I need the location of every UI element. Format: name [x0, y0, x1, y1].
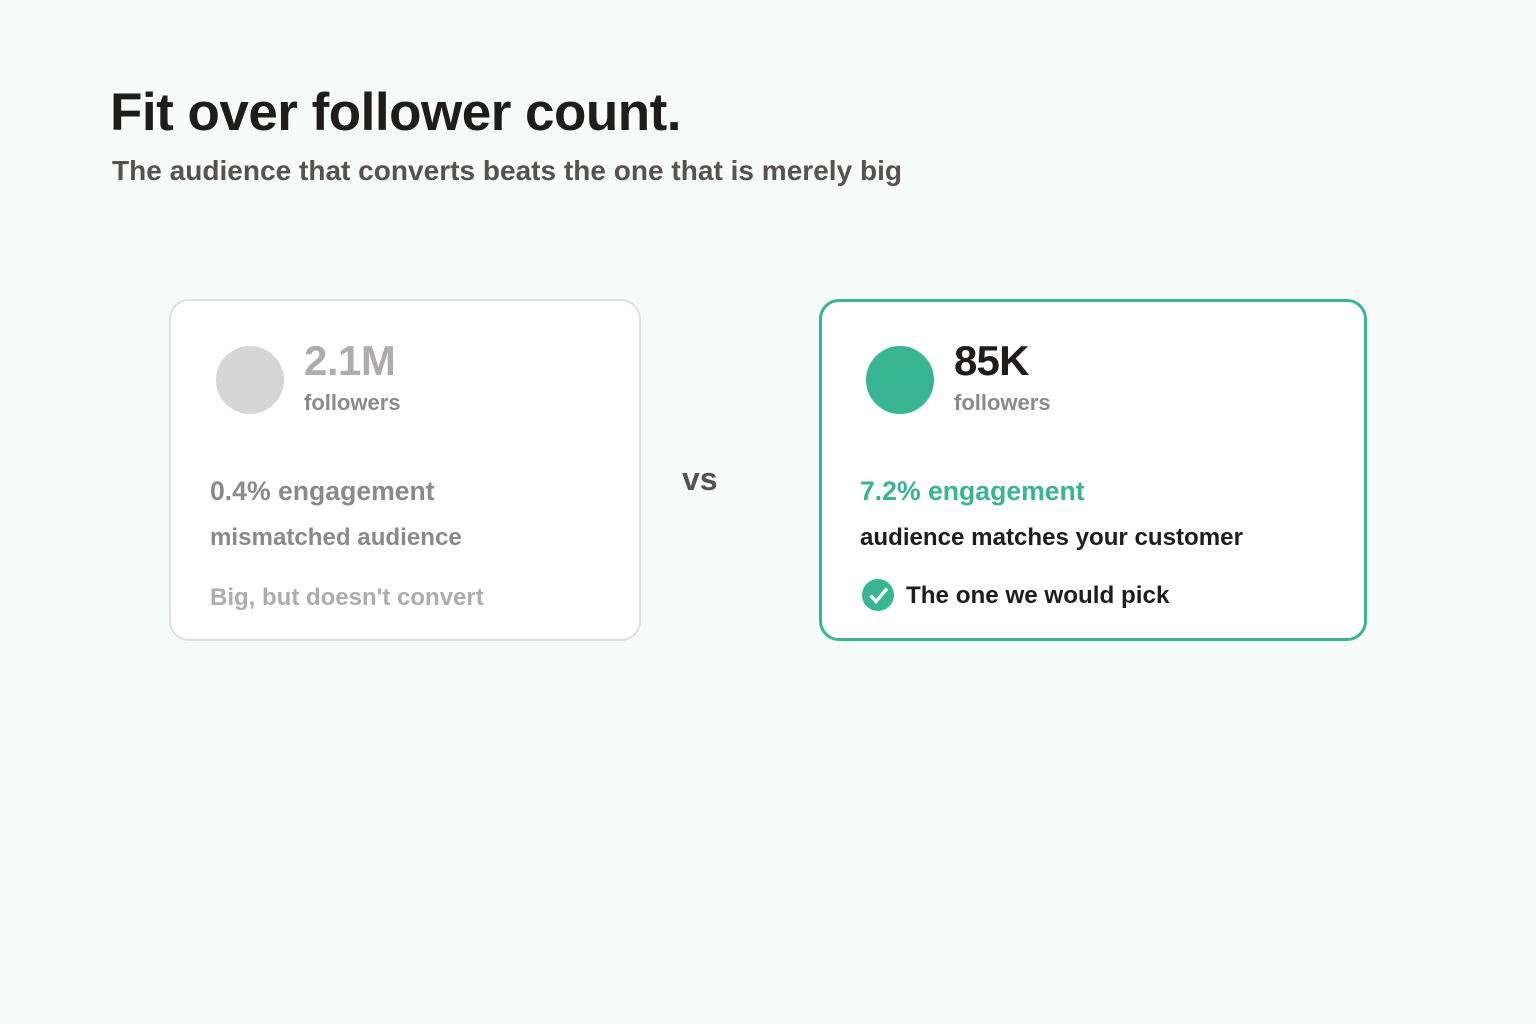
label: followers: followers — [304, 390, 401, 415]
stat: 85K: 85K — [954, 337, 1029, 384]
panel: fit account — [819, 299, 1367, 641]
audience note: audience matches your customer — [860, 524, 1243, 551]
verdict: The one we would pick — [906, 582, 1169, 609]
stat: 2.1M: 2.1M — [304, 337, 395, 384]
title: Fit over follower count. — [110, 83, 681, 142]
label: followers: followers — [954, 390, 1051, 415]
avatar: grey circle — [216, 346, 284, 414]
icon: check mark — [862, 579, 894, 611]
vs label: vs — [682, 461, 718, 497]
subtitle: The audience that converts beats the one that is merely big — [112, 155, 902, 186]
verdict: Big, but doesn't convert — [210, 584, 484, 611]
engagement: 0.4%: 0.4% engagement — [210, 476, 435, 506]
avatar: green circle — [866, 346, 934, 414]
panel: big account — [169, 299, 641, 641]
audience note: mismatched audience — [210, 524, 462, 551]
engagement: 7.2%: 7.2% engagement — [860, 476, 1085, 506]
